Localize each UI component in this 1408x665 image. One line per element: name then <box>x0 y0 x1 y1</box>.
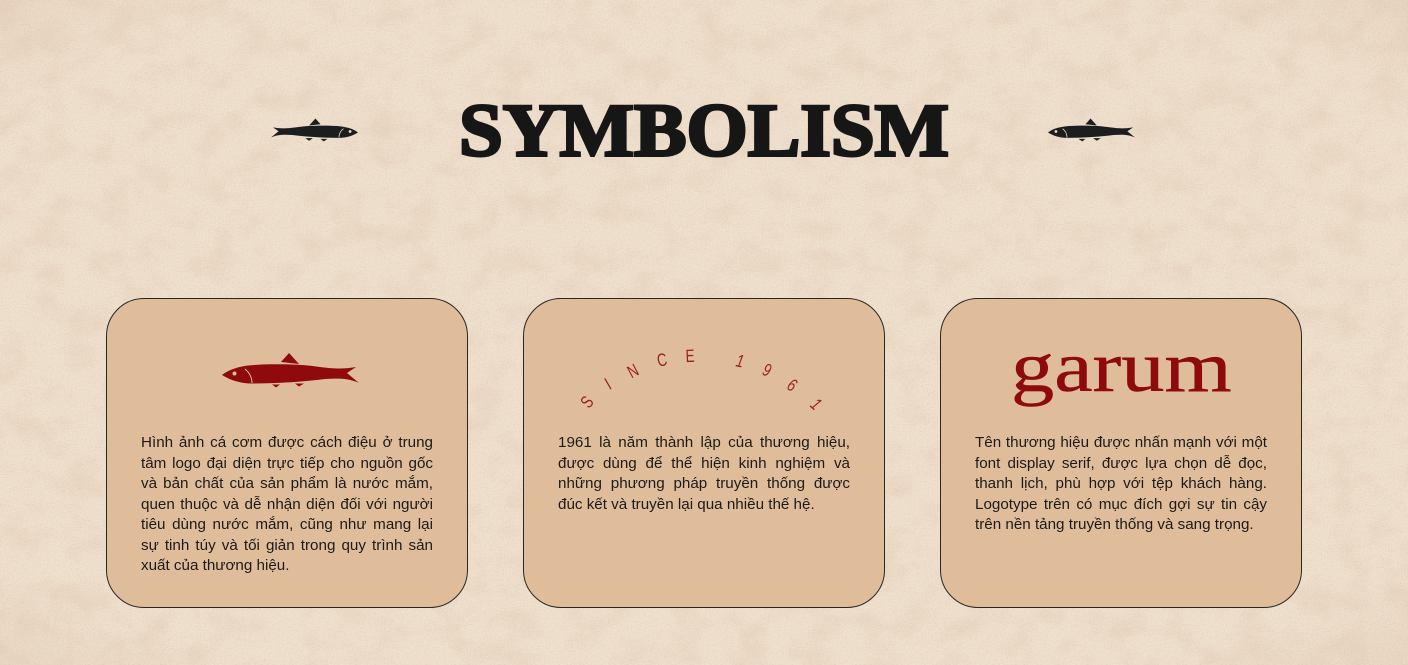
arc text: since 1961: 1 <box>806 395 825 414</box>
text block: since 1961 description: những phương pháp truyền thống được <box>558 475 850 492</box>
arc text: since 1961 <box>577 347 825 414</box>
text block: fish description: Hình ảnh cá cơm được cách điệu ở trung <box>141 434 433 451</box>
icon: left small fish <box>271 118 358 141</box>
text block: garum description: font display serif, được lựa chọn dễ đọc, <box>975 454 1267 472</box>
text block: since 1961 description: được dùng để thể hiện kinh nghiệm và <box>558 454 850 472</box>
arc text: since 1961: C <box>655 350 669 371</box>
arc text: since 1961: 1 <box>734 352 745 372</box>
text block: fish description: và bản chất của sản phẩm là nước mắm, <box>141 475 433 492</box>
arc text: since 1961: 9 <box>760 361 774 381</box>
text block: garum description: Logotype trên có mục đích gợi sự tin cậy <box>975 496 1267 512</box>
panel: fish symbol <box>106 298 468 608</box>
arc text: since 1961: 6 <box>783 376 800 396</box>
text block: since 1961 description: 1961 là năm thành lập của thương hiệu, <box>558 434 850 451</box>
logotype: garum: garum <box>1011 328 1232 407</box>
text block: fish description: tâm logo đại diện trực tiếp cho nguồn gốc <box>141 454 433 472</box>
text block: garum description: thanh lịch, phù hợp với tệp khách hàng. <box>975 475 1267 492</box>
text block: fish description: xuất của thương hiệu. <box>141 557 289 574</box>
text block: garum description: Tên thương hiệu được nhấn mạnh với một <box>975 434 1267 451</box>
arc text: since 1961: N <box>625 361 642 383</box>
text block: fish description: quen thuộc và dễ nhận diện đối với người <box>141 496 433 512</box>
text block: since 1961 description <box>558 434 850 512</box>
arc text: since 1961: E <box>685 347 695 367</box>
title: SYMBOLISM <box>459 88 949 172</box>
text block: fish description: sự tinh túy và tối giản trong quy trình sản <box>141 536 433 554</box>
text block: garum description: trên nền tảng truyền thống và sang trọng. <box>975 516 1254 533</box>
arc text: since 1961: I <box>602 376 615 394</box>
arc text: since 1961: S <box>577 393 598 412</box>
panel: garum logotype <box>940 298 1302 608</box>
text block: fish description: tiêu dùng nước mắm, cũng như mang lại <box>141 516 433 533</box>
icon: red fish <box>222 353 359 388</box>
icon: right small fish <box>1048 118 1135 141</box>
text block: since 1961 description: đúc kết và truyền lại qua nhiều thế hệ. <box>558 496 815 512</box>
text block: fish description <box>141 434 433 574</box>
panel: since 1961 <box>523 298 885 608</box>
text block: garum description <box>975 434 1267 533</box>
